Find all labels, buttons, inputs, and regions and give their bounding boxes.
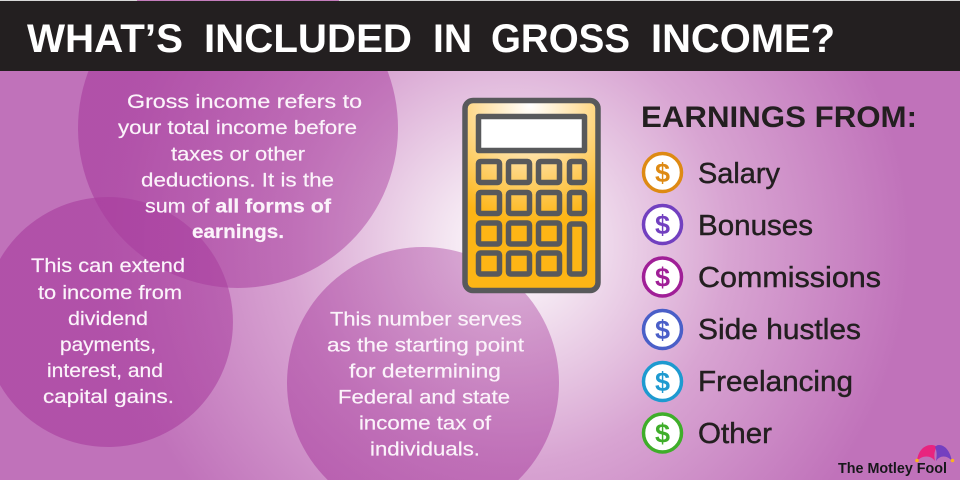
text: other income sources: interest, and	[47, 360, 163, 382]
text: gross income definition: deductions. It is the	[141, 170, 334, 192]
list item: salary: $	[655, 158, 670, 188]
title	[27, 17, 835, 61]
circle: gross income	[78, 0, 398, 288]
text: gross income definition: earnings.	[192, 221, 284, 243]
list item: side hustles	[644, 310, 861, 348]
title: IN	[433, 17, 472, 61]
list item: commissions: $	[655, 262, 670, 292]
list item: bonuses	[644, 206, 813, 244]
title bar	[0, 0, 960, 71]
icon: calculator	[465, 100, 598, 290]
list item: salary: Salary	[698, 158, 780, 190]
text: gross income definition: your total income before	[118, 117, 357, 139]
text: other income sources: payments,	[60, 334, 156, 356]
heading: earnings from: EARNINGS FROM:	[641, 101, 917, 134]
text: tax starting point: This number serves	[330, 308, 522, 330]
list item: freelancing: Freelancing	[698, 366, 853, 398]
circle: other income	[0, 197, 233, 447]
text: gross income definition: taxes or other	[171, 144, 306, 166]
text: tax starting point: for determining	[349, 360, 501, 382]
title: INCOME?	[651, 17, 835, 61]
list item: other: Other	[698, 418, 772, 450]
list item: side hustles: $	[655, 315, 670, 345]
text: other income sources: This can extend	[31, 255, 185, 277]
list item: side hustles: Side hustles	[698, 314, 861, 346]
title: WHAT’S	[27, 17, 183, 61]
text: tax starting point: as the starting point	[327, 334, 525, 356]
text: tax starting point: Federal and state	[338, 386, 510, 408]
text: tax starting point: income tax of	[359, 412, 492, 434]
text: tax starting point	[327, 308, 525, 460]
list item: bonuses: Bonuses	[698, 210, 813, 242]
text: other income sources: capital gains.	[43, 386, 174, 408]
text: other income sources: dividend	[68, 308, 148, 330]
circle: tax starting point	[287, 247, 559, 480]
text: tax starting point: individuals.	[370, 438, 480, 460]
title: INCLUDED	[204, 17, 412, 61]
list item: commissions	[644, 258, 881, 296]
list item: other	[644, 414, 772, 452]
text: gross income definition: Gross income refers to	[127, 91, 362, 113]
panel: earnings list	[641, 101, 917, 452]
text: gross income definition	[118, 91, 362, 243]
logo: the motley fool	[838, 445, 954, 477]
text: other income sources	[31, 255, 185, 408]
list item: other: $	[655, 418, 670, 448]
list item: salary	[644, 154, 780, 192]
logo: the motley fool: The Motley Fool	[838, 461, 947, 477]
list item: freelancing: $	[655, 367, 670, 397]
text: gross income definition: sum of all forms of	[145, 196, 332, 218]
list item: freelancing	[644, 362, 853, 400]
list item: commissions: Commissions	[698, 262, 881, 294]
list item: bonuses: $	[655, 210, 670, 240]
icon: jester hat	[915, 445, 954, 462]
text: other income sources: to income from	[38, 282, 182, 304]
title: GROSS	[491, 17, 630, 61]
